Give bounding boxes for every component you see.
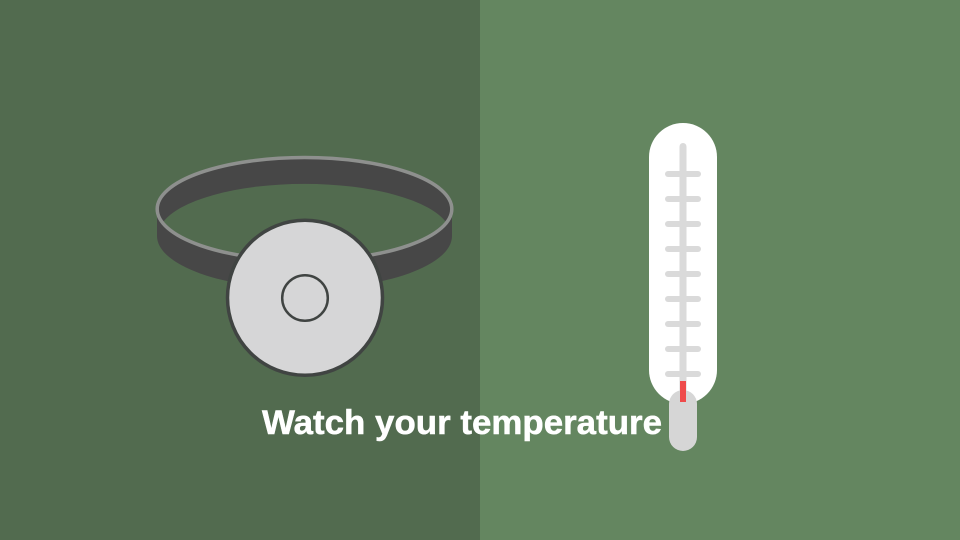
thermometer body xyxy=(649,123,717,404)
mercury level xyxy=(680,381,686,402)
head band xyxy=(157,157,452,289)
panel: right background xyxy=(480,0,960,540)
icon: thermometer xyxy=(649,123,717,451)
mirror centre hole xyxy=(282,275,328,321)
title: Watch your temperature xyxy=(262,404,662,442)
panel: left background xyxy=(0,0,480,540)
thermometer ticks xyxy=(665,171,701,377)
thermometer stem xyxy=(680,143,686,393)
icon: head mirror xyxy=(157,157,452,375)
mirror disc xyxy=(228,220,382,375)
thermometer bulb xyxy=(669,390,697,451)
